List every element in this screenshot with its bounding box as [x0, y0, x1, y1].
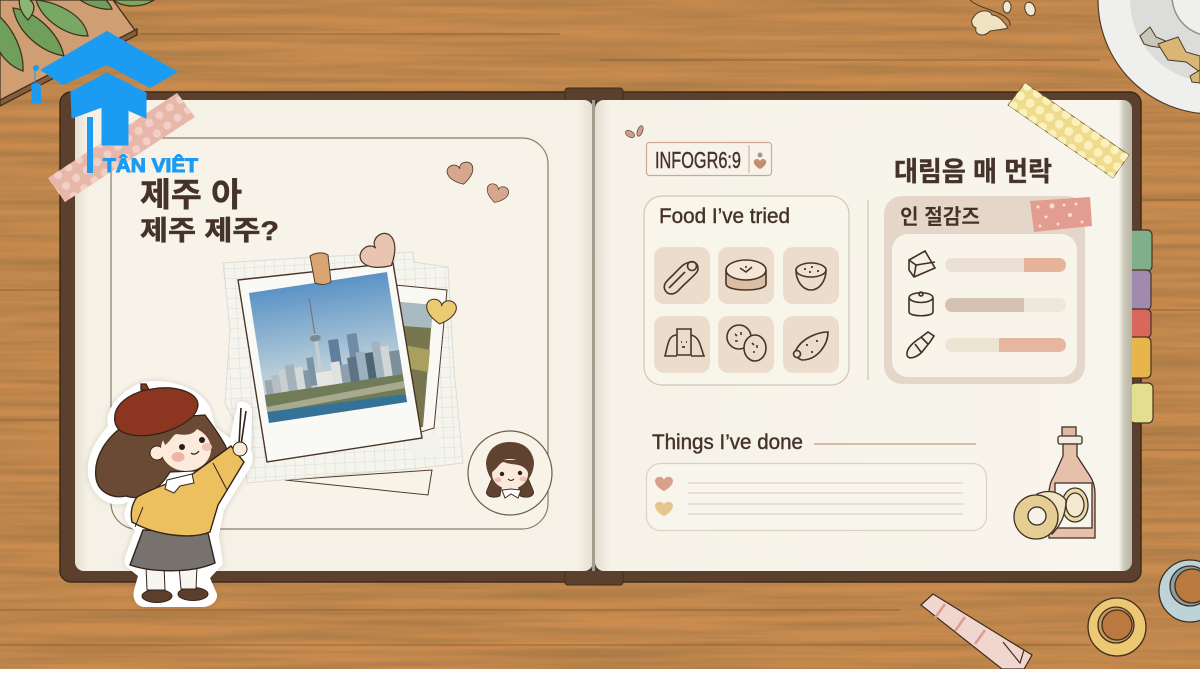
yellow roll	[1088, 598, 1146, 656]
index tabs	[1125, 230, 1153, 423]
logo: Tan Viet: TÂN VIÊT	[103, 155, 198, 177]
left page	[75, 100, 593, 571]
clip	[310, 253, 331, 284]
dried flower decoration	[970, 0, 1037, 35]
bottle and tape roll	[1014, 427, 1095, 539]
bars	[945, 258, 1066, 352]
fringe	[163, 420, 212, 445]
main polaroid	[238, 263, 422, 462]
spine gutter	[592, 100, 595, 571]
tape scrap	[407, 433, 442, 458]
icon: heart	[655, 502, 673, 516]
title	[140, 176, 279, 246]
panel: things done	[646, 464, 986, 530]
tower	[304, 297, 328, 383]
girl character sticker	[88, 381, 253, 607]
panel: rating	[884, 196, 1092, 384]
socks	[146, 566, 197, 590]
heading: things done: Things I’ve done	[652, 431, 803, 454]
hand and chopsticks	[233, 408, 247, 456]
skyscrapers	[259, 327, 403, 397]
food tiles	[654, 247, 839, 373]
back paper	[285, 470, 432, 495]
tape rolls	[1088, 560, 1200, 656]
city skyline photo	[249, 272, 407, 423]
rating icons	[907, 251, 935, 358]
face	[161, 427, 211, 471]
shore and water	[265, 374, 406, 415]
leaf accent	[624, 125, 644, 139]
yellow heart	[425, 299, 457, 325]
label tag: INFOGR6:9	[655, 147, 741, 173]
shoes	[142, 588, 208, 602]
notebook cover	[60, 88, 1141, 585]
bottom white strip	[0, 669, 1200, 675]
blue roll	[1159, 560, 1200, 622]
washi strip on desk	[921, 594, 1032, 669]
right page	[595, 100, 1132, 571]
yellow washi tape	[1008, 83, 1129, 178]
collar	[165, 474, 194, 493]
icon: heart	[655, 477, 673, 491]
plate with bow utensil	[1098, 0, 1200, 114]
heading: right column: 대림음 매 먼락	[894, 157, 1052, 187]
eyes, mouth, blush	[172, 437, 212, 462]
panel heading: 인 절감즈	[900, 206, 980, 229]
sweater	[131, 446, 244, 536]
pink heart	[356, 230, 406, 278]
washi patch	[1030, 197, 1092, 232]
title: 제주 아	[140, 176, 242, 213]
white sticker outline	[88, 381, 253, 607]
grid paper	[223, 252, 463, 483]
wooden board with leaves	[0, 0, 154, 106]
back polaroid	[395, 285, 447, 440]
avatar badge	[468, 431, 552, 515]
photo collage	[223, 230, 463, 495]
skirt	[130, 530, 215, 571]
logo: Tan Viet	[32, 32, 198, 177]
left page frame	[111, 138, 548, 529]
hair back	[96, 415, 226, 498]
icon: small hearts	[446, 161, 510, 205]
divider	[867, 200, 869, 380]
beret	[115, 384, 198, 436]
panel: food tried	[644, 196, 849, 385]
pink washi tape	[48, 93, 195, 202]
food icons	[664, 260, 828, 361]
title: 제주 제주?	[140, 216, 279, 246]
ear	[150, 446, 164, 460]
sticker shadow	[88, 381, 253, 607]
heading: food: Food I’ve tried	[659, 205, 790, 228]
